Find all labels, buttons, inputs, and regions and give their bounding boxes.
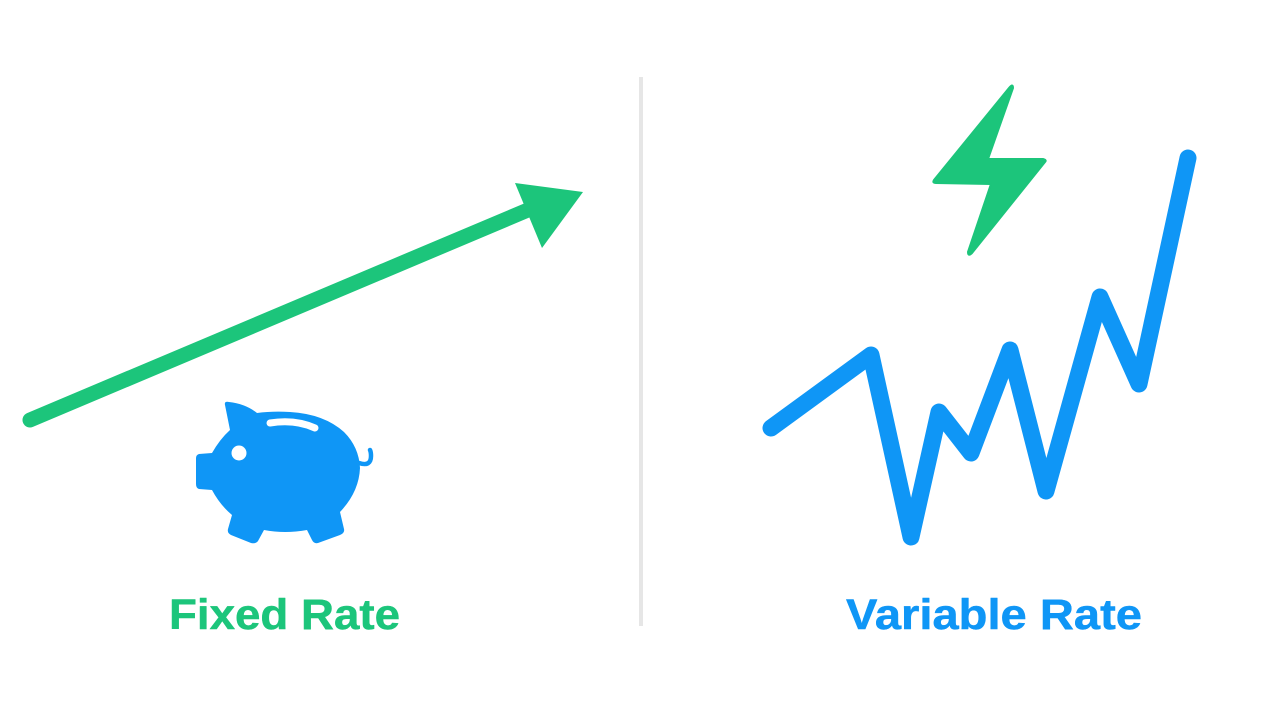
icon: lightning bolt	[933, 86, 1046, 255]
label: Variable Rate: Variable Rate	[846, 591, 1142, 639]
piggy bank coin slot	[270, 422, 315, 428]
panel: fixed rate	[30, 183, 583, 639]
panel: variable rate	[771, 86, 1188, 639]
arrow: rising fixed rate	[30, 183, 583, 420]
label: Fixed Rate: Fixed Rate	[169, 591, 400, 639]
chart: volatile variable rate line	[771, 158, 1188, 537]
icon: piggy bank	[196, 402, 371, 543]
